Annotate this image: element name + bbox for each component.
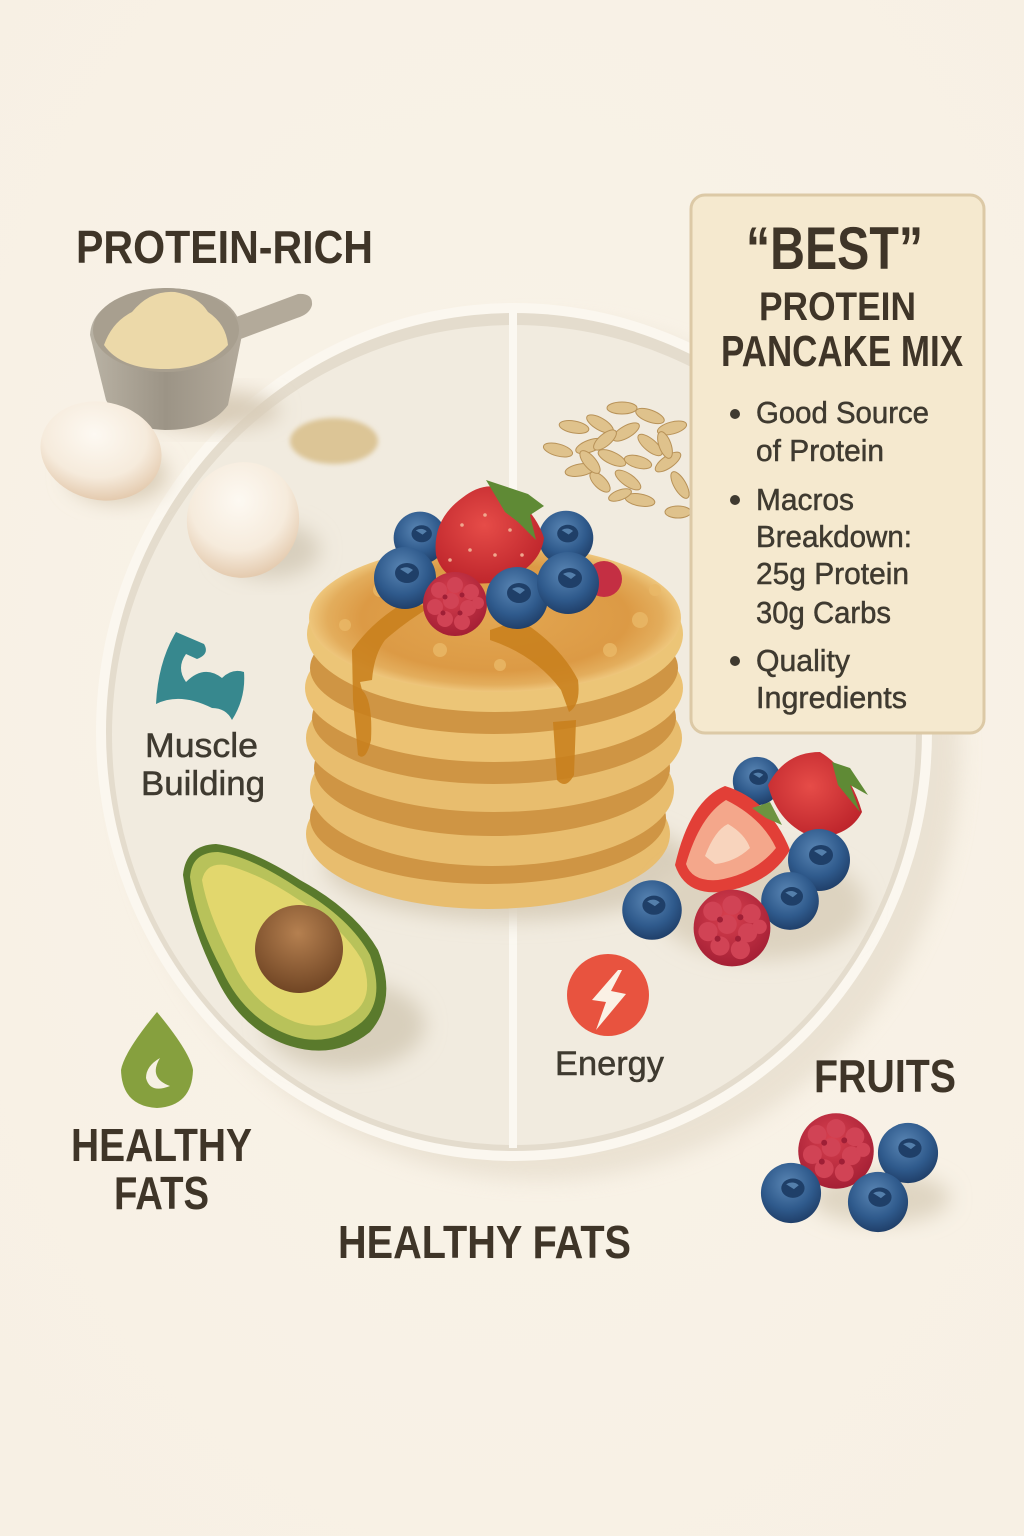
syrup [352, 604, 579, 784]
heading: healthy fats left: HEALTHY [71, 1119, 252, 1171]
bullet list [730, 395, 929, 715]
icon: muscle [156, 632, 244, 720]
label: muscle building [141, 727, 265, 803]
icon: avocado [183, 844, 425, 1070]
heading: protein-rich: PROTEIN-RICH [76, 221, 373, 273]
berries on top [374, 480, 622, 636]
bullet list: Quality [756, 643, 850, 678]
icon: energy [567, 954, 649, 1036]
bullet list: Ingredients [756, 680, 907, 715]
info panel [691, 195, 984, 733]
heading: healthy fats left [71, 1119, 252, 1219]
icon: protein scoop [90, 288, 312, 430]
panel subtitle [721, 285, 963, 376]
bullet list: 25g Protein [756, 556, 909, 591]
label: muscle building: Muscle [145, 727, 258, 765]
heading: fruits: FRUITS [814, 1050, 956, 1102]
fruit group on plate [622, 752, 868, 966]
panel title: “BEST” [746, 215, 923, 282]
label: muscle building: Building [141, 765, 265, 803]
icon: healthy fats drop [121, 1012, 193, 1108]
bullet list: 30g Carbs [756, 595, 891, 630]
heading: healthy fats bottom: HEALTHY FATS [338, 1216, 631, 1268]
plate [96, 303, 960, 1180]
label: energy: Energy [555, 1045, 664, 1083]
protein powder pile [290, 418, 378, 464]
bullet list: Good Source [756, 395, 929, 430]
pancake stack [305, 544, 695, 920]
bullet list: of Protein [756, 433, 884, 468]
icon: egg on plate [174, 449, 320, 591]
oats [542, 402, 693, 518]
panel subtitle: PROTEIN [759, 285, 916, 329]
panel subtitle: PANCAKE MIX [721, 327, 963, 376]
icon: egg outside plate [31, 390, 171, 512]
fruit group bottom right [761, 1113, 950, 1232]
heading: healthy fats left: FATS [114, 1167, 209, 1219]
bullet list: Macros [756, 482, 854, 517]
bullet list: Breakdown: [756, 519, 912, 554]
